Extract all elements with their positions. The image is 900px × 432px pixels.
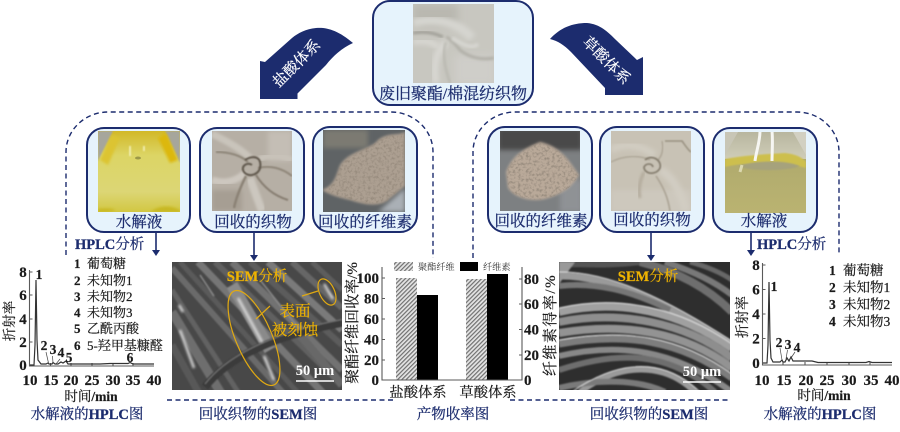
legend: HPLC left: 3 xyxy=(74,289,81,304)
panel: source fabric xyxy=(373,1,533,105)
chart: product yield: 100 xyxy=(356,271,379,287)
legend: HPLC right: 未知物1 xyxy=(843,279,890,295)
arrow: HPLC right xyxy=(747,232,755,256)
legend: HPLC left: 4 xyxy=(74,305,81,320)
chart: HPLC left: 30 xyxy=(106,373,120,389)
photo: cellulose powder xyxy=(322,130,405,212)
panel: recovered fabric right xyxy=(600,127,704,232)
chart: product yield: 0 xyxy=(372,373,379,389)
legend: HPLC left: 未知物3 xyxy=(87,305,133,320)
chart: product yield: 20 xyxy=(524,348,539,364)
legend: HPLC left: 未知物1 xyxy=(87,273,133,288)
legend: HPLC right: 未知物2 xyxy=(843,296,890,312)
legend: HPLC left xyxy=(74,256,163,353)
legend: HPLC left: 2 xyxy=(74,273,80,288)
arrow: SEM left xyxy=(250,232,258,261)
chart: HPLC left: 25 xyxy=(84,373,100,389)
chart: HPLC right: 15 xyxy=(776,373,792,389)
chart: product yield: 80 xyxy=(524,272,539,288)
dashed frame: hydrochloric acid xyxy=(66,112,433,258)
chart: product yield: 60 xyxy=(364,312,379,328)
chart: product yield: 0 xyxy=(524,373,532,389)
chart: HPLC right: 25 xyxy=(820,373,834,389)
legend: HPLC left: 未知物2 xyxy=(87,289,133,304)
chart: product yield: 40 xyxy=(364,332,379,348)
chart: HPLC left: 1 xyxy=(36,267,43,282)
chart: HPLC right: 2 xyxy=(776,335,783,350)
chart: product yield: 20 xyxy=(364,353,379,369)
chart: HPLC left: 6 xyxy=(127,350,134,365)
dashed frame: oxalic acid xyxy=(473,112,839,258)
chart: HPLC right: 时间/min xyxy=(797,388,851,403)
chart: HPLC left: 4 xyxy=(19,312,27,328)
chart: HPLC right: 3 xyxy=(785,337,792,352)
chart: HPLC right: 折射率 xyxy=(734,296,751,338)
bars xyxy=(396,274,508,380)
chart: HPLC left xyxy=(1,265,162,404)
chart: product yield xyxy=(343,261,559,401)
label: SEM analysis: SEM分析 xyxy=(618,268,678,285)
chart: HPLC left: 10 xyxy=(22,373,38,389)
panel: hydrolysate right xyxy=(713,128,817,232)
chart: HPLC right: 8 xyxy=(752,258,760,274)
caption: 回收的纤维素 xyxy=(318,213,412,231)
scale bar: 50 μm xyxy=(683,364,721,380)
chart: HPLC left: 8 xyxy=(19,265,27,281)
chart: HPLC right: 35 xyxy=(864,373,878,389)
chart: product yield: 40 xyxy=(524,322,539,338)
chart: HPLC left: 6 xyxy=(19,288,27,304)
photo: swirl fabric grey xyxy=(212,131,292,211)
legend xyxy=(394,261,511,272)
callout: etched surface xyxy=(218,276,340,392)
arrow: HPLC left xyxy=(152,232,160,256)
title: SEM right: 回收织物的SEM图 xyxy=(590,405,708,423)
title: HPLC right: 水解液的HPLC图 xyxy=(764,405,876,423)
chart: HPLC left: 3 xyxy=(50,342,57,357)
title: HPLC left: 水解液的HPLC图 xyxy=(31,405,143,423)
caption: source fabric: 废旧聚酯/棉混纺织物 xyxy=(379,85,527,103)
chart: HPLC right: 20 xyxy=(798,373,814,389)
caption: 回收的织物 xyxy=(214,213,292,231)
legend: HPLC left: 5-羟甲基糠醛 xyxy=(87,338,163,353)
caption: 回收的织物 xyxy=(613,211,691,229)
chart: product yield: 60 xyxy=(524,297,539,313)
legend: HPLC right xyxy=(829,262,890,329)
chart: product yield: 聚酯纤维回收率/% xyxy=(343,262,361,384)
label: surface etched: 被刻蚀 xyxy=(272,320,319,339)
label: HPLC left: HPLC分析 xyxy=(75,236,144,253)
legend: HPLC left: 葡萄糖 xyxy=(87,256,126,271)
chart: HPLC right: 4 xyxy=(794,340,801,355)
legend: HPLC right: 3 xyxy=(829,297,836,312)
legend: HPLC right: 2 xyxy=(829,280,836,295)
legend: HPLC right: 1 xyxy=(829,263,836,278)
photo: flask with pale liquid xyxy=(725,131,806,213)
legend: HPLC left: 乙酰丙酸 xyxy=(87,321,140,336)
label: HPLC right: HPLC分析 xyxy=(757,236,826,253)
chart: product yield: 草酸体系 xyxy=(459,384,517,401)
chart: product yield: 盐酸体系 xyxy=(389,383,447,401)
chart: HPLC right xyxy=(734,258,900,403)
legend: HPLC right: 未知物3 xyxy=(843,313,890,329)
legend: HPLC left: 6 xyxy=(74,338,81,353)
photo: waste polyester cotton fabric xyxy=(413,4,495,85)
image: SEM right xyxy=(559,262,732,392)
title: SEM left: 回收织物的SEM图 xyxy=(199,405,317,423)
label: surface etched xyxy=(272,301,319,339)
photo: yellow liquid flask xyxy=(98,131,180,212)
panel: recovered fabric left xyxy=(200,128,304,232)
chart: product yield: 纤维素得率/% xyxy=(542,274,559,376)
chart: HPLC right: 40 xyxy=(884,373,900,389)
chart: HPLC left: 35 xyxy=(126,373,140,389)
arrow: oxalic acid system: 草酸体系 xyxy=(579,33,634,88)
chart: HPLC left: 2 xyxy=(41,338,48,353)
panel: recovered cellulose left xyxy=(313,127,417,232)
chart: HPLC left: 40 xyxy=(146,373,162,389)
legend: 聚酯纤维 xyxy=(418,261,455,272)
label: SEM analysis: SEM分析 xyxy=(227,268,287,285)
photo: swirl fabric light xyxy=(611,131,691,212)
chart: HPLC left: 时间/min xyxy=(64,389,118,404)
chart: HPLC left: 15 xyxy=(44,373,58,389)
chart: HPLC right: 6 xyxy=(752,282,760,298)
scale bar: 50 μm xyxy=(296,363,334,379)
label: surface etched: 表面 xyxy=(279,301,311,320)
chart: HPLC right: 2 xyxy=(752,332,760,348)
chart: HPLC left: 0 xyxy=(19,358,27,374)
arrow: hydrochloric acid system xyxy=(260,28,353,99)
chart: HPLC left: 2 xyxy=(19,335,27,351)
legend: 纤维素 xyxy=(483,261,511,272)
legend: HPLC left: 1 xyxy=(74,256,80,271)
chart: HPLC left: 5 xyxy=(66,350,73,365)
caption: 水解液 xyxy=(116,213,163,231)
image: SEM left xyxy=(172,262,342,395)
legend: HPLC right: 4 xyxy=(829,314,836,329)
legend: HPLC left: 5 xyxy=(74,321,81,336)
chart: HPLC right: 1 xyxy=(771,279,778,294)
chart: HPLC right: 10 xyxy=(754,373,770,389)
photo: cellulose powder xyxy=(498,128,582,212)
chart: HPLC right: 30 xyxy=(842,373,856,389)
arrow: SEM right xyxy=(647,232,655,261)
chart: HPLC left: 20 xyxy=(64,373,78,389)
title: yield: 产物收率图 xyxy=(417,405,489,423)
caption: 回收的纤维素 xyxy=(494,212,588,230)
chart: HPLC left: 折射率 xyxy=(1,300,17,341)
divider lines xyxy=(167,399,728,401)
legend: HPLC right: 葡萄糖 xyxy=(843,262,884,278)
chart: HPLC right: 4 xyxy=(752,307,760,323)
caption: 水解液 xyxy=(741,212,788,230)
arrow: hydrochloric acid system: 盐酸体系 xyxy=(269,36,324,91)
chart: HPLC left: 4 xyxy=(58,345,65,360)
panel: recovered cellulose right xyxy=(488,127,592,232)
arrow: oxalic acid system xyxy=(550,23,643,95)
chart: product yield: 80 xyxy=(364,292,379,308)
panel: hydrolysate left xyxy=(87,128,190,232)
chart: HPLC right: 0 xyxy=(752,356,760,372)
